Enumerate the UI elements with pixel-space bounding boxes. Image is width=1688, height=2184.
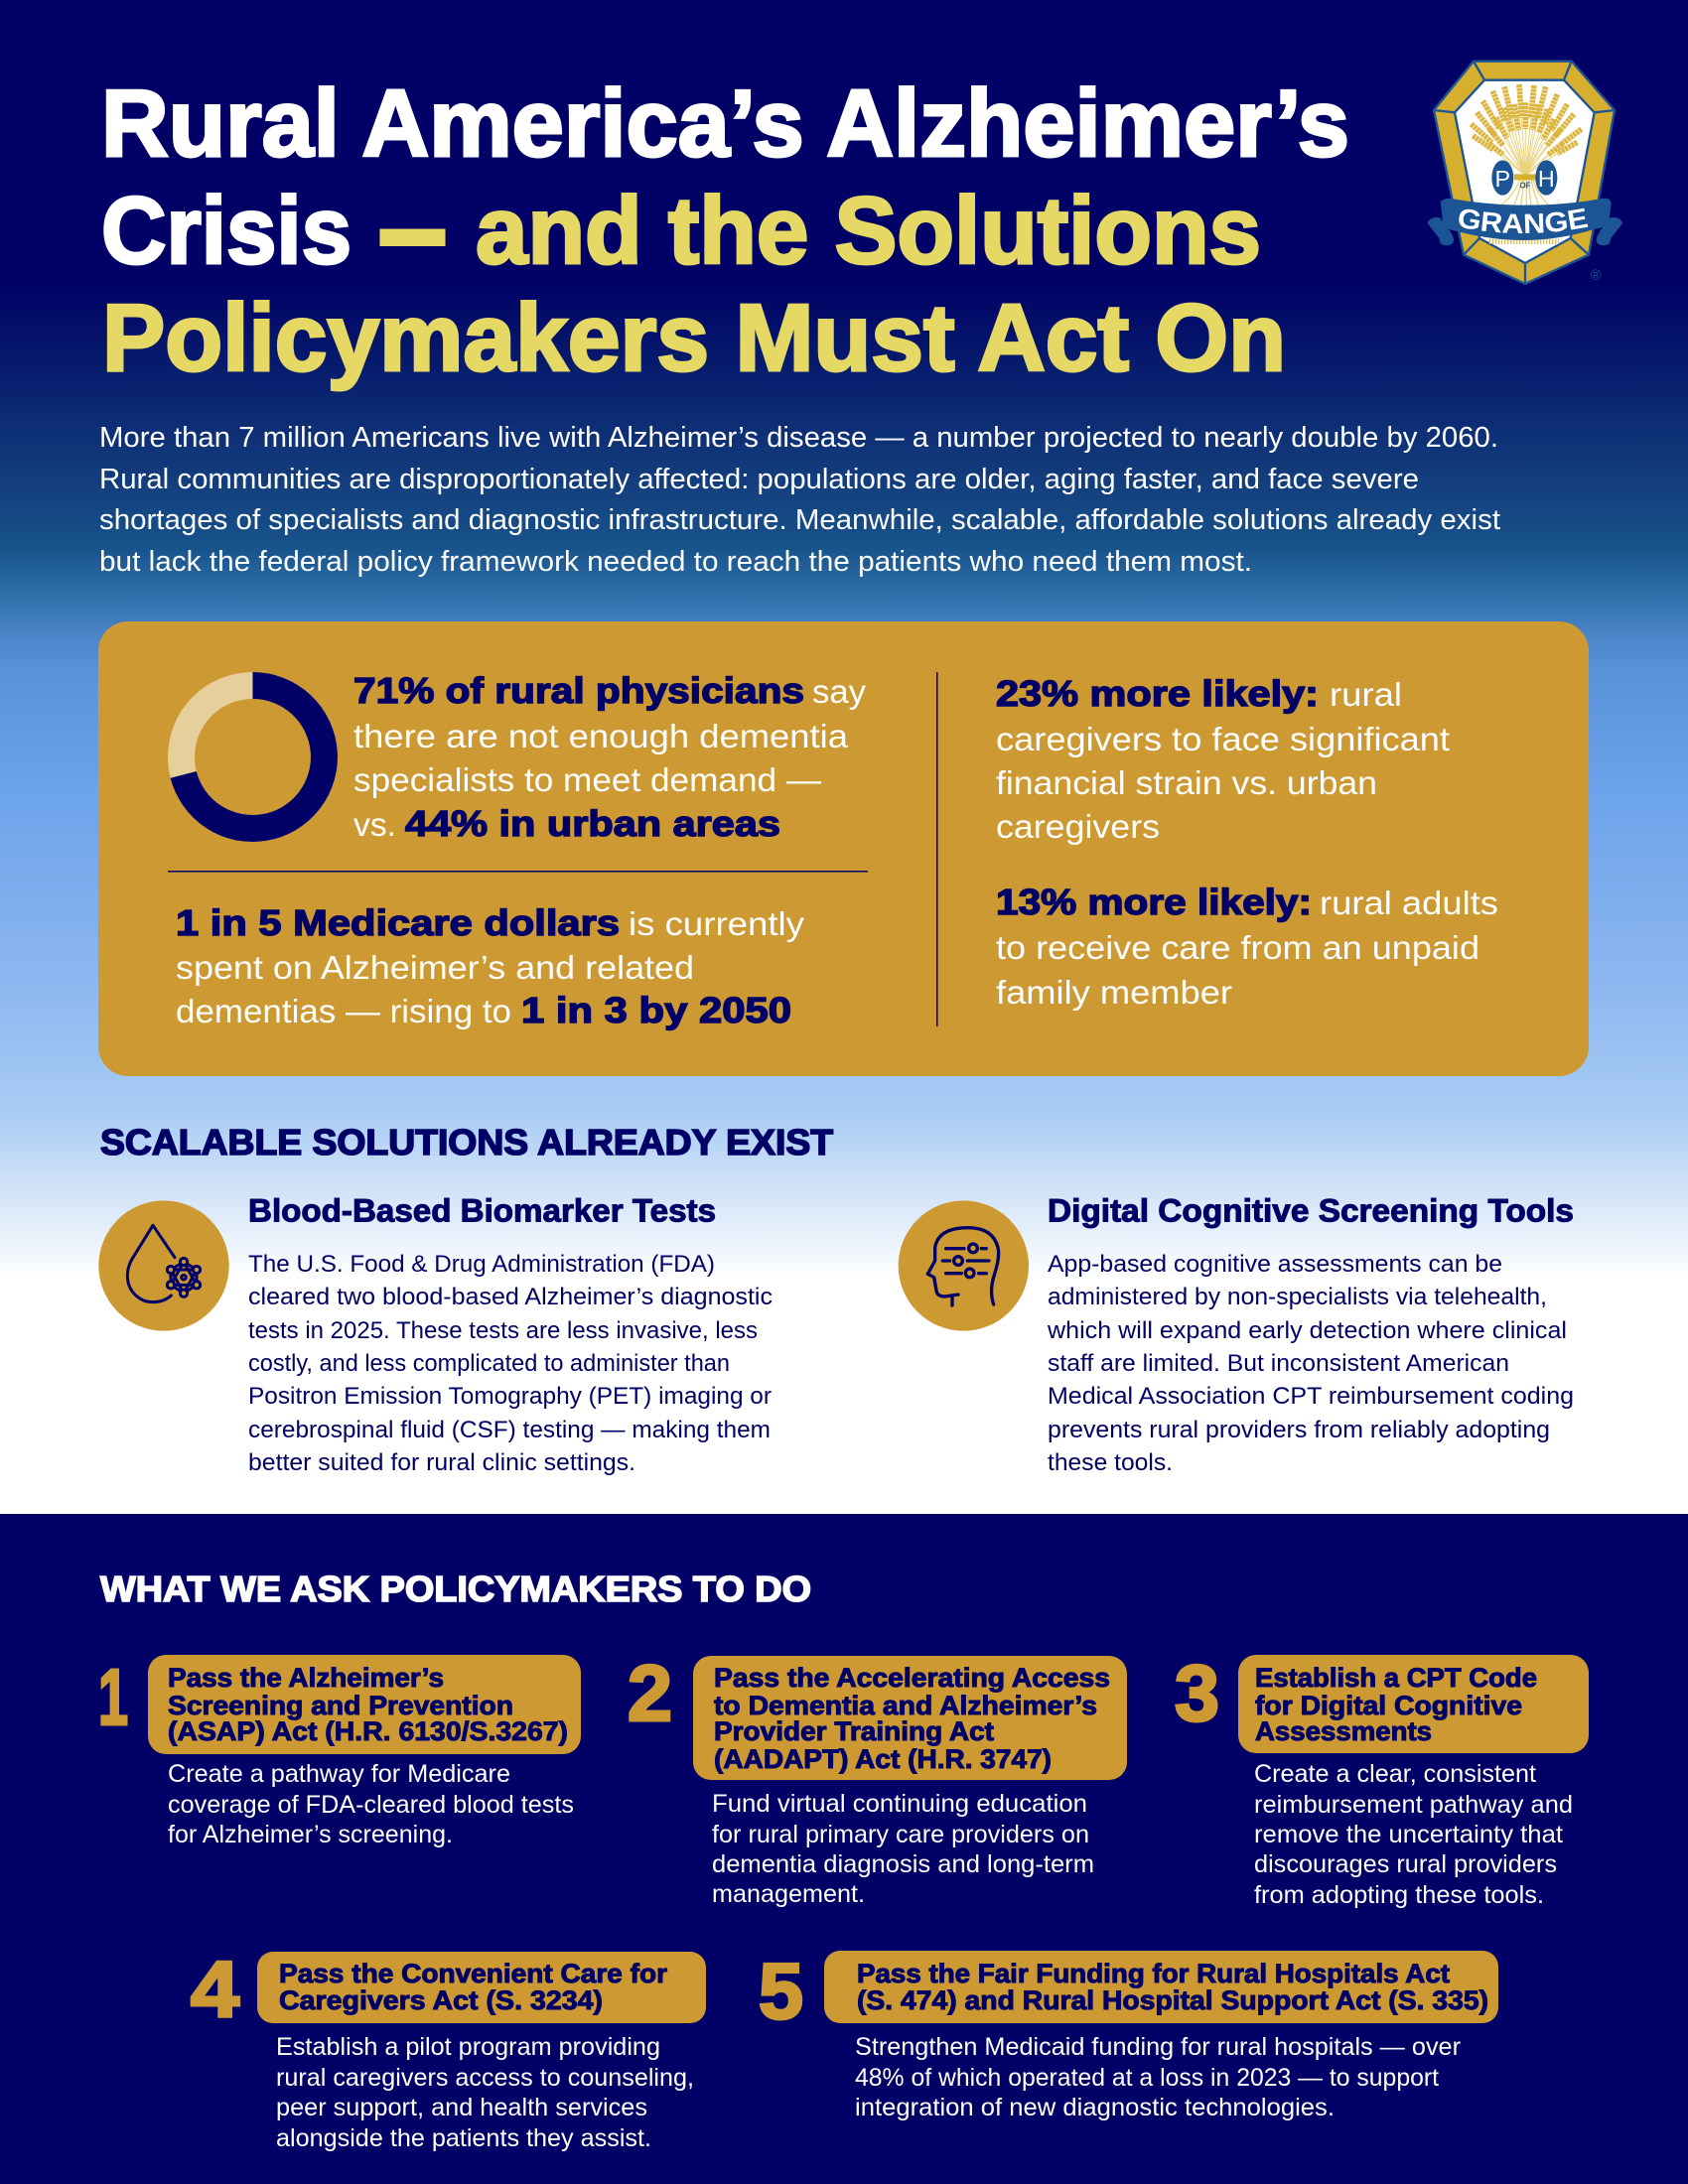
ask 1: (ASAP) Act (H.R. 6130/S.3267) xyxy=(168,1716,568,1746)
stat: rural physicians xyxy=(353,670,867,844)
ask 4: 4 xyxy=(191,1945,240,2033)
ask 1: coverage of FDA-cleared blood tests xyxy=(168,1791,574,1819)
ask 3: from adopting these tools. xyxy=(1254,1881,1544,1909)
stat: Medicare dollars: 1 in 5 Medicare dollars xyxy=(176,902,620,943)
ask 4: peer support, and health services xyxy=(276,2094,647,2121)
stat: unpaid family care xyxy=(996,882,1498,1011)
title: and the Solutions xyxy=(476,178,1261,284)
solution: blood-based biomarker tests: cerebrospinal fluid (CSF) testing — making them xyxy=(248,1417,771,1443)
ask 3: Create a clear, consistent xyxy=(1254,1760,1536,1788)
solution: digital cognitive screening tools: administered by non-specialists via telehealth, xyxy=(1048,1284,1547,1310)
solution: blood-based biomarker tests: cleared two blood-based Alzheimer’s diagnostic xyxy=(248,1284,773,1310)
ask 1 xyxy=(98,1653,581,1848)
stat: unpaid family care: family member xyxy=(996,974,1232,1011)
solution: digital cognitive screening tools xyxy=(1047,1193,1574,1476)
intro paragraph: Rural communities are disproportionately affected: populations are older, aging faster, and face severe xyxy=(99,464,1419,495)
heading: what we ask: WHAT WE ASK POLICYMAKERS TO DO xyxy=(100,1569,811,1609)
ask 2: for rural primary care providers on xyxy=(712,1821,1089,1848)
ask 2: Fund virtual continuing education xyxy=(712,1790,1087,1818)
ask 4: Pass the Convenient Care for xyxy=(279,1959,668,1988)
title: Crisis xyxy=(101,178,352,284)
ask 1: Create a pathway for Medicare xyxy=(168,1760,510,1788)
logo: Grange emblem: ® xyxy=(1591,268,1602,284)
stat: caregiver financial strain xyxy=(996,673,1450,845)
stat: caregiver financial strain: caregivers xyxy=(996,808,1160,845)
solution: digital cognitive screening tools: App-based cognitive assessments can be xyxy=(1048,1251,1502,1278)
ask 2: Pass the Accelerating Access xyxy=(714,1663,1110,1693)
ask 4: Establish a pilot program providing xyxy=(276,2033,660,2061)
title xyxy=(101,70,1349,391)
ask 2: to Dementia and Alzheimer’s xyxy=(714,1691,1097,1720)
stat: unpaid family care: to receive care from an unpaid xyxy=(996,929,1479,966)
logo: Grange emblem xyxy=(1428,60,1622,286)
ask 4 xyxy=(191,1945,706,2152)
ask 2: Provider Training Act xyxy=(714,1716,994,1746)
ask 1: 1 xyxy=(98,1653,128,1741)
solution: blood-based biomarker tests: The U.S. Food & Drug Administration (FDA) xyxy=(248,1251,715,1278)
stat: Medicare dollars xyxy=(176,902,805,1030)
ask 2: dementia diagnosis and long-term xyxy=(712,1850,1094,1878)
solution: digital cognitive screening tools: staff are limited. But inconsistent American xyxy=(1048,1350,1509,1377)
solution: digital cognitive screening tools: these tools. xyxy=(1048,1449,1173,1476)
ask 2: (AADAPT) Act (H.R. 3747) xyxy=(714,1744,1052,1774)
ask 5: integration of new diagnostic technologies. xyxy=(855,2094,1335,2121)
ask 4: Caregivers Act (S. 3234) xyxy=(279,1985,603,2015)
stat: Medicare dollars: spent on Alzheimer’s and related xyxy=(176,949,694,986)
stat: rural physicians: 71% of rural physicians xyxy=(353,670,804,711)
intro paragraph: More than 7 million Americans live with Alzheimer’s disease — a number projected to nearly double by 2060. xyxy=(99,422,1498,454)
title: Policymakers Must Act On xyxy=(102,285,1286,391)
ask 1: Pass the Alzheimer’s xyxy=(168,1663,444,1693)
icon: blood drop with molecule xyxy=(98,1200,229,1331)
title: Rural America’s Alzheimer’s xyxy=(101,70,1349,177)
solution: blood-based biomarker tests: Blood-Based Biomarker Tests xyxy=(248,1193,716,1229)
stat: rural physicians: vs. xyxy=(353,806,396,843)
solution: digital cognitive screening tools: Digital Cognitive Screening Tools xyxy=(1048,1193,1574,1229)
ask 3: Establish a CPT Code xyxy=(1255,1663,1537,1693)
ask 5: Strengthen Medicaid funding for rural hospitals — over xyxy=(855,2033,1461,2061)
ask 3: remove the uncertainty that xyxy=(1254,1821,1563,1848)
stat: caregiver financial strain: caregivers to face significant xyxy=(996,721,1450,757)
intro paragraph xyxy=(99,422,1500,578)
stat: unpaid family care: rural adults xyxy=(1320,885,1498,921)
stat: caregiver financial strain: 23% more likely: xyxy=(996,673,1319,714)
icon: head with sliders xyxy=(899,1200,1029,1331)
logo: Grange emblem: H xyxy=(1538,166,1555,192)
ask 5: Pass the Fair Funding for Rural Hospitals Act xyxy=(857,1959,1450,1988)
stat: rural physicians: there are not enough dementia xyxy=(353,718,849,754)
stat: caregiver financial strain: rural xyxy=(1330,676,1402,713)
stat: Medicare dollars: dementias — rising to xyxy=(176,993,511,1029)
ask 1: Screening and Prevention xyxy=(168,1691,513,1720)
stat: caregiver financial strain: financial strain vs. urban xyxy=(996,764,1377,801)
solution: digital cognitive screening tools: which will expand early detection where clinical xyxy=(1047,1317,1567,1344)
stat: rural physicians: specialists to meet demand — xyxy=(353,761,821,798)
ask 5: 5 xyxy=(759,1947,803,2035)
solution: blood-based biomarker tests: tests in 2025. These tests are less invasive, less xyxy=(248,1317,758,1344)
heading: scalable solutions: SCALABLE SOLUTIONS ALREADY EXIST xyxy=(100,1122,833,1162)
logo: Grange emblem: P xyxy=(1495,166,1510,192)
solution: blood-based biomarker tests: better suited for rural clinic settings. xyxy=(248,1449,635,1476)
ask 2 xyxy=(628,1649,1127,1908)
ask 3: discourages rural providers xyxy=(1254,1850,1557,1878)
intro paragraph: shortages of specialists and diagnostic infrastructure. Meanwhile, scalable, affordable solutions already exist xyxy=(99,504,1500,536)
ask 2: management. xyxy=(712,1880,865,1908)
stat: Medicare dollars: is currently xyxy=(629,905,805,942)
stat: rural physicians: say xyxy=(812,673,867,710)
chart: 71% donut xyxy=(181,685,324,828)
panel: key statistics xyxy=(98,621,1589,1076)
ask 1: for Alzheimer’s screening. xyxy=(168,1821,453,1848)
ask 5: (S. 474) and Rural Hospital Support Act (S. 335) xyxy=(857,1985,1488,2015)
solution: digital cognitive screening tools: prevents rural providers from reliably adopting xyxy=(1048,1417,1550,1443)
solution: blood-based biomarker tests: Positron Emission Tomography (PET) imaging or xyxy=(248,1383,772,1410)
ask 2: 2 xyxy=(628,1649,672,1737)
logo: Grange emblem: GRANGE xyxy=(1459,208,1589,234)
ask 5: 48% of which operated at a loss in 2023 — to support xyxy=(855,2064,1439,2092)
stat: rural physicians: 44% in urban areas xyxy=(405,803,780,844)
intro paragraph: but lack the federal policy framework needed to reach the patients who need them most. xyxy=(99,546,1252,578)
solution: blood-based biomarker tests: costly, and less complicated to administer than xyxy=(248,1350,730,1377)
stat: unpaid family care: 13% more likely: xyxy=(996,882,1312,922)
ask 3: Assessments xyxy=(1255,1716,1432,1746)
ask 4: alongside the patients they assist. xyxy=(276,2124,651,2152)
ask 5 xyxy=(759,1947,1498,2121)
ask 3: for Digital Cognitive xyxy=(1255,1691,1522,1720)
ask 4: rural caregivers access to counseling, xyxy=(276,2064,694,2092)
ask 3: reimbursement pathway and xyxy=(1254,1791,1573,1819)
stat: Medicare dollars: 1 in 3 by 2050 xyxy=(521,990,791,1030)
logo: Grange emblem: OF xyxy=(1519,181,1531,190)
ask 3 xyxy=(1175,1649,1589,1909)
ask 3: 3 xyxy=(1175,1649,1219,1737)
title: — xyxy=(382,178,443,284)
solution: digital cognitive screening tools: Medical Association CPT reimbursement coding xyxy=(1048,1383,1574,1410)
solution: blood-based biomarker tests xyxy=(248,1193,773,1476)
